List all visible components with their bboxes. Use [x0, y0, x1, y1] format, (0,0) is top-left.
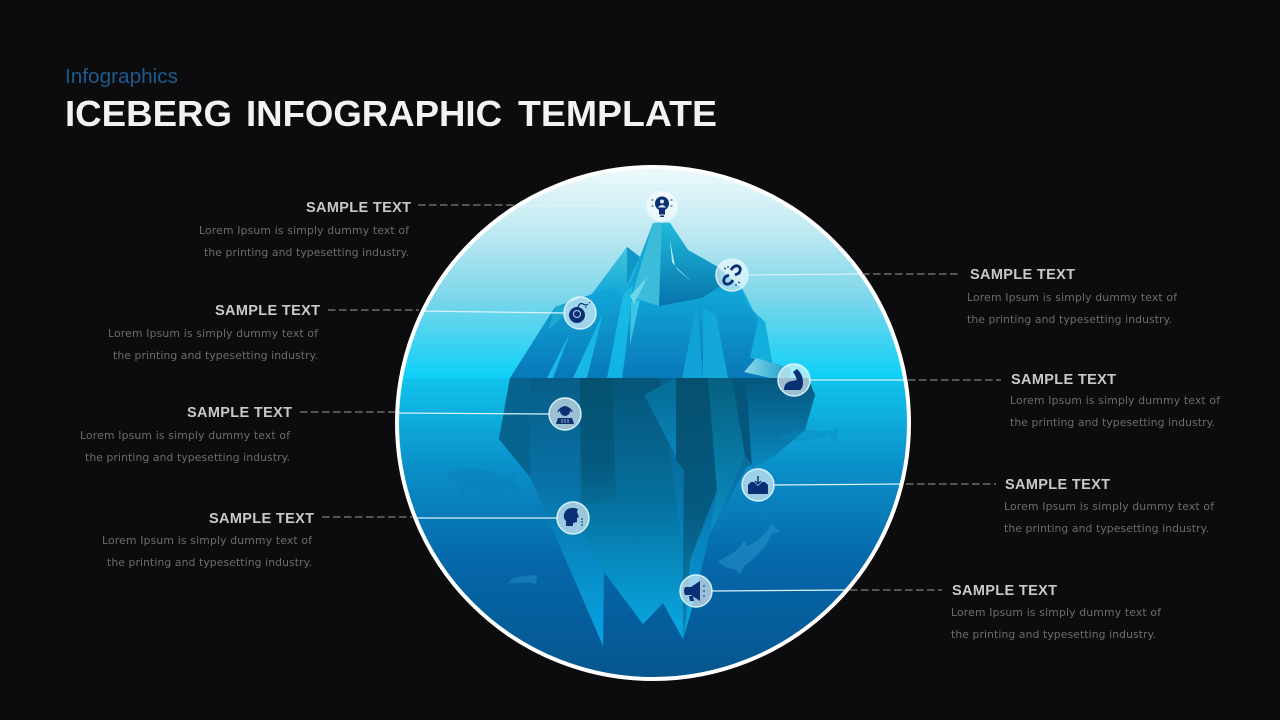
iceberg below water: [499, 378, 815, 646]
sea: [397, 378, 909, 681]
icon: bomb: [564, 297, 596, 329]
item 3 left: [80, 405, 396, 464]
item 8 bottom right: the printing and typesetting industry.: [951, 628, 1156, 641]
item 2 left: SAMPLE TEXT: [215, 303, 320, 319]
icon: light bulb: [646, 190, 678, 222]
leader lines inside circle: [399, 273, 904, 592]
title: INFOGRAPHIC: [246, 93, 502, 134]
item 5 top right: SAMPLE TEXT: [970, 267, 1075, 283]
item 6 right: [908, 372, 1220, 429]
eyebrow heading: Infographics: [65, 65, 178, 88]
item 2 left: Lorem Ipsum is simply dummy text of: [108, 327, 318, 340]
title: [65, 93, 717, 134]
iceberg above water: [510, 222, 790, 380]
item 8 bottom right: SAMPLE TEXT: [952, 583, 1057, 599]
icon: megaphone: [680, 575, 712, 607]
shark silhouettes: [508, 428, 839, 584]
item 3 left: Lorem Ipsum is simply dummy text of: [80, 429, 290, 442]
item 2 left: [108, 303, 419, 362]
item 4 left: the printing and typesetting industry.: [107, 556, 312, 569]
item 1 top left: the printing and typesetting industry.: [204, 246, 409, 259]
item 1 top left: SAMPLE TEXT: [306, 200, 411, 216]
icon: flexed arm: [778, 364, 810, 396]
item 4 left: Lorem Ipsum is simply dummy text of: [102, 534, 312, 547]
item 5 top right: [862, 267, 1177, 326]
icon: speaking head: [557, 502, 589, 534]
item 7 right: the printing and typesetting industry.: [1004, 522, 1209, 535]
icon: broken chain: [716, 259, 748, 291]
item 6 right: SAMPLE TEXT: [1011, 372, 1116, 388]
item 4 left: SAMPLE TEXT: [209, 511, 314, 527]
item 3 left: the printing and typesetting industry.: [85, 451, 290, 464]
title: ICEBERG: [65, 93, 232, 134]
item 5 top right: Lorem Ipsum is simply dummy text of: [967, 291, 1177, 304]
iceberg circle illustration: [396, 167, 909, 681]
item 6 right: Lorem Ipsum is simply dummy text of: [1010, 394, 1220, 407]
item 2 left: the printing and typesetting industry.: [113, 349, 318, 362]
item 5 top right: the printing and typesetting industry.: [967, 313, 1172, 326]
sky: [397, 167, 909, 379]
icon: inbox download: [742, 469, 774, 501]
item 7 right: Lorem Ipsum is simply dummy text of: [1004, 500, 1214, 513]
item 7 right: [906, 477, 1214, 535]
item 3 left: SAMPLE TEXT: [187, 405, 292, 421]
item 6 right: the printing and typesetting industry.: [1010, 416, 1215, 429]
item 1 top left: [199, 200, 516, 259]
item 1 top left: Lorem Ipsum is simply dummy text of: [199, 224, 409, 237]
item 4 left: [102, 511, 412, 569]
icon: headset person: [549, 398, 581, 430]
title: TEMPLATE: [518, 93, 717, 134]
item 8 bottom right: Lorem Ipsum is simply dummy text of: [951, 606, 1161, 619]
item 7 right: SAMPLE TEXT: [1005, 477, 1110, 493]
circle ring: [397, 167, 909, 679]
item 8 bottom right: [850, 583, 1161, 641]
